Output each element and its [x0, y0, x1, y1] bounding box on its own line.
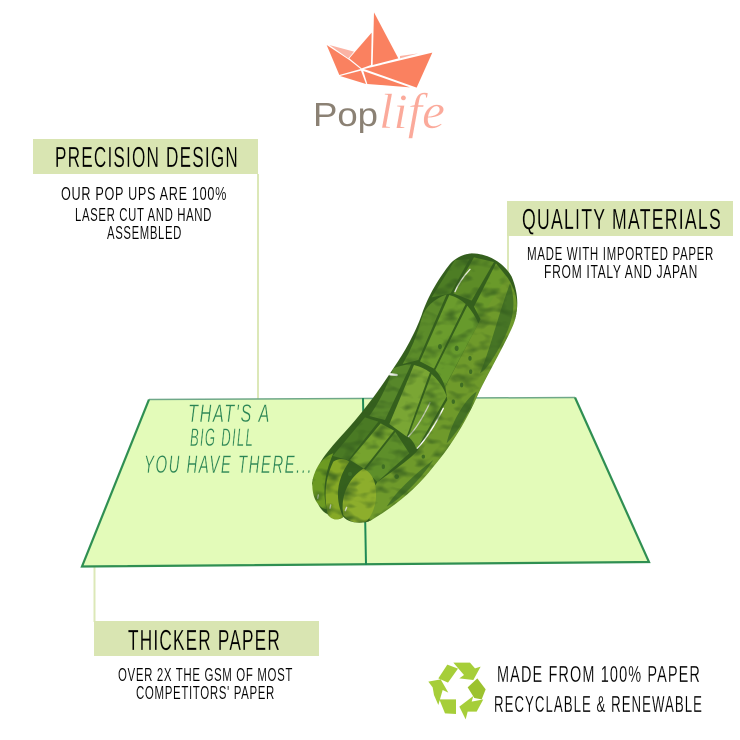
- callout: precision design: OUR POP UPS ARE 100%: [61, 184, 227, 204]
- callout: thicker paper: OVER 2X THE GSM OF MOST: [118, 665, 293, 685]
- skin bumps: [348, 344, 472, 479]
- card message: YOU HAVE THERE...: [144, 451, 313, 479]
- highlights: [318, 269, 470, 511]
- card centre fold: [363, 398, 366, 565]
- recycling text: [494, 661, 703, 717]
- card message: [144, 400, 313, 479]
- callout: thicker paper: [94, 566, 319, 703]
- front section strips: [333, 417, 409, 482]
- right strip dark mottling: [387, 283, 513, 507]
- front end lobes: [312, 453, 376, 523]
- logo wordmark: Pop: [313, 96, 378, 133]
- back section strips: [432, 257, 507, 319]
- front-middle section strips: [369, 364, 447, 449]
- recycling note: [428, 661, 703, 719]
- logo: Poplife: [313, 12, 445, 139]
- logo wordmark: life: [379, 83, 445, 139]
- icon: origami paper boat: [327, 12, 432, 88]
- callout: precision design: [33, 139, 258, 400]
- logo wordmark: [313, 83, 445, 139]
- callout: precision design: LASER CUT AND HAND: [75, 205, 212, 225]
- card outer edges: [82, 398, 649, 566]
- middle section strips: [403, 294, 478, 387]
- card message: THAT'S A: [188, 400, 271, 428]
- pop-up card: [82, 398, 649, 566]
- card back edge: [149, 398, 575, 400]
- callout: thicker paper: THICKER PAPER: [128, 625, 281, 657]
- icon: recycling arrows: [428, 663, 486, 719]
- callout: quality materials: [507, 201, 733, 285]
- callout: thicker paper: COMPETITORS' PAPER: [136, 683, 275, 703]
- callout: precision design: PRECISION DESIGN: [55, 142, 239, 174]
- card panel: [82, 398, 649, 566]
- callout: precision design: ASSEMBLED: [107, 223, 182, 243]
- card message: BIG DILL: [190, 424, 254, 452]
- pickle body: [312, 253, 517, 523]
- illustration: pickle pop-up: [312, 253, 517, 523]
- right outer strip: [368, 277, 517, 521]
